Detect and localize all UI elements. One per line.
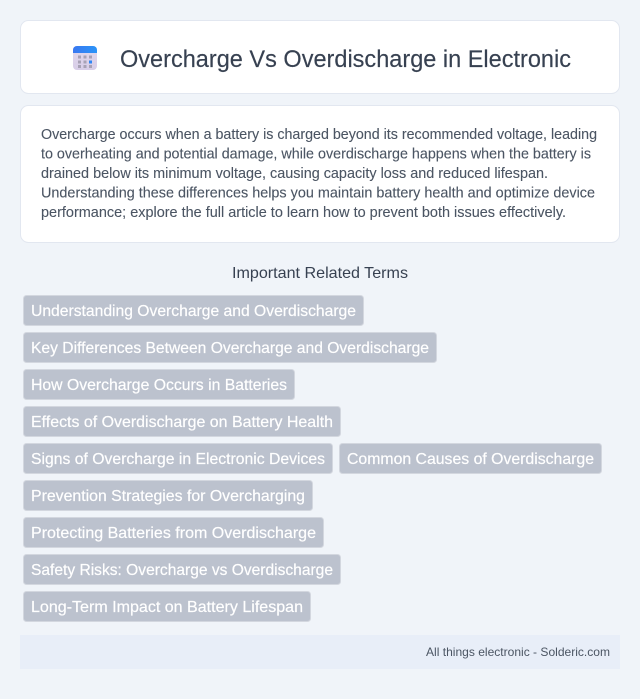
panel: summary paragraph: performance; explore the full article to learn how to prevent both issues effectively. (41, 205, 566, 221)
footer (20, 635, 620, 669)
tag: protecting batteries: Protecting Batteries from Overdischarge (31, 525, 316, 542)
tag: signs of overcharge: Signs of Overcharge in Electronic Devices (31, 451, 325, 468)
tag: common causes: Common Causes of Overdischarge (347, 451, 594, 468)
tag: effects of overdischarge (24, 406, 340, 436)
panel: header (20, 20, 620, 94)
tag: key differences (24, 332, 436, 362)
tag: protecting batteries (24, 518, 324, 548)
tag: signs of overcharge (24, 444, 332, 474)
icon: calendar (73, 46, 97, 70)
tag: safety risks: Safety Risks: Overcharge vs Overdischarge (31, 562, 333, 579)
tag: understanding (24, 296, 364, 326)
title: Overcharge Vs Overdischarge in Electronic (120, 46, 571, 73)
tag: how overcharge occurs: How Overcharge Occurs in Batteries (31, 377, 287, 394)
tag: how overcharge occurs (24, 370, 294, 400)
tag: common causes (340, 444, 602, 474)
tag: understanding: Understanding Overcharge and Overdischarge (31, 303, 356, 320)
panel: summary paragraph: to overheating and potential damage, while overdischarge happens when the battery is (41, 146, 591, 162)
tag: long-term impact: Long-Term Impact on Battery Lifespan (31, 599, 303, 616)
footer: All things electronic - Solderic.com (426, 645, 610, 659)
heading: important related terms: Important Related Terms (232, 265, 408, 282)
tag: safety risks (24, 554, 340, 584)
tag: key differences: Key Differences Between Overcharge and Overdischarge (31, 340, 429, 357)
panel: summary paragraph: Understanding these differences helps you maintain battery health and optimize device (41, 185, 595, 201)
panel: summary paragraph: Overcharge occurs when a battery is charged beyond its recommended voltage, leading (41, 127, 597, 143)
tag: prevention strategies: Prevention Strategies for Overcharging (31, 488, 305, 505)
panel: summary paragraph: drained below its minimum voltage, causing capacity loss and reduced lifespan. (41, 166, 548, 182)
tag: long-term impact (24, 592, 310, 622)
tag: effects of overdischarge: Effects of Overdischarge on Battery Health (31, 414, 333, 431)
tag: prevention strategies (24, 480, 312, 510)
panel: summary paragraph (20, 106, 620, 242)
